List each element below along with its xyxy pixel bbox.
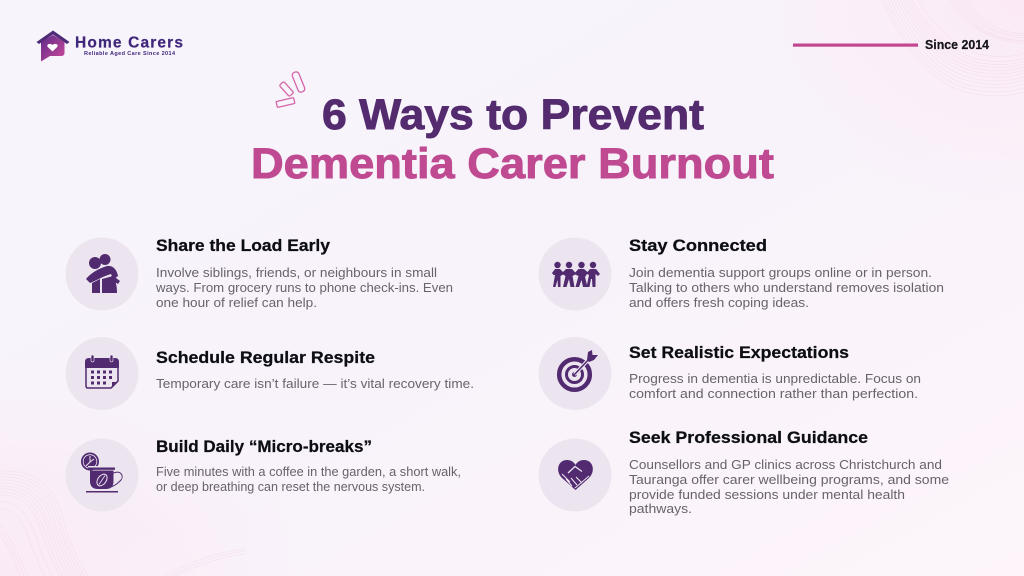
body text: comfort and connection rather than perfection. (629, 386, 918, 401)
body text (629, 371, 921, 401)
icon: target with arrow (559, 350, 598, 390)
body text: Involve siblings, friends, or neighbours in small (156, 265, 437, 280)
body text: one hour of relief can help. (156, 295, 317, 310)
since 2014 marker (793, 38, 989, 52)
body text (156, 464, 461, 494)
body text: and offers fresh coping ideas. (629, 295, 809, 310)
body text: provide funded sessions under mental health (629, 487, 905, 502)
heading: Set Realistic Expectations (629, 343, 849, 362)
item: Seek Professional Guidance (538, 428, 949, 516)
item: Schedule Regular Respite (66, 337, 474, 410)
item: Stay Connected (538, 236, 944, 310)
body text (155, 265, 453, 310)
heading: Share the Load Early (156, 236, 331, 255)
heading: Seek Professional Guidance (629, 428, 868, 447)
icon: heart with handshake (558, 460, 593, 490)
icon: calendar (85, 355, 119, 388)
body text: ways. From grocery runs to phone check-ins. Even (155, 280, 453, 295)
body text: pathways. (629, 501, 692, 516)
item: Share the Load Early (66, 236, 453, 310)
title accent marks (276, 71, 306, 107)
body text: Temporary care isn’t failure — it’s vital recovery time. (156, 376, 474, 391)
body text: Counsellors and GP clinics across Christchurch and (629, 457, 942, 472)
body text: Join dementia support groups online or in person. (629, 265, 932, 280)
icon: row of people holding hands (552, 262, 600, 287)
since 2014 marker: Since 2014 (925, 38, 989, 52)
body text: Tauranga offer carer wellbeing programs, and some (629, 472, 949, 487)
body text (629, 457, 949, 516)
heading: Build Daily “Micro-breaks” (156, 437, 372, 456)
item: Build Daily Micro-breaks (66, 437, 461, 512)
body text: Progress in dementia is unpredictable. Focus on (629, 371, 921, 386)
heading: Stay Connected (629, 236, 767, 255)
item: Set Realistic Expectations (538, 337, 921, 410)
body text (629, 265, 944, 310)
icon: house speech bubble with heart (36, 30, 70, 62)
body text: or deep breathing can reset the nervous system. (156, 479, 425, 494)
icon: two people hugging (86, 254, 120, 293)
logo wordmark: Home Carers (75, 34, 183, 52)
title: 6 Ways to Prevent (322, 91, 704, 139)
logo tagline: Reliable Aged Care Since 2014 (84, 51, 176, 57)
title (251, 91, 774, 188)
body text: Five minutes with a coffee in the garden, a short walk, (156, 464, 461, 479)
title: Dementia Carer Burnout (251, 140, 774, 188)
body text: Talking to others who understand removes isolation (629, 280, 944, 295)
logo: Home Carers (36, 30, 183, 62)
icon: coffee cup and clock (81, 452, 122, 492)
heading: Schedule Regular Respite (156, 348, 375, 367)
